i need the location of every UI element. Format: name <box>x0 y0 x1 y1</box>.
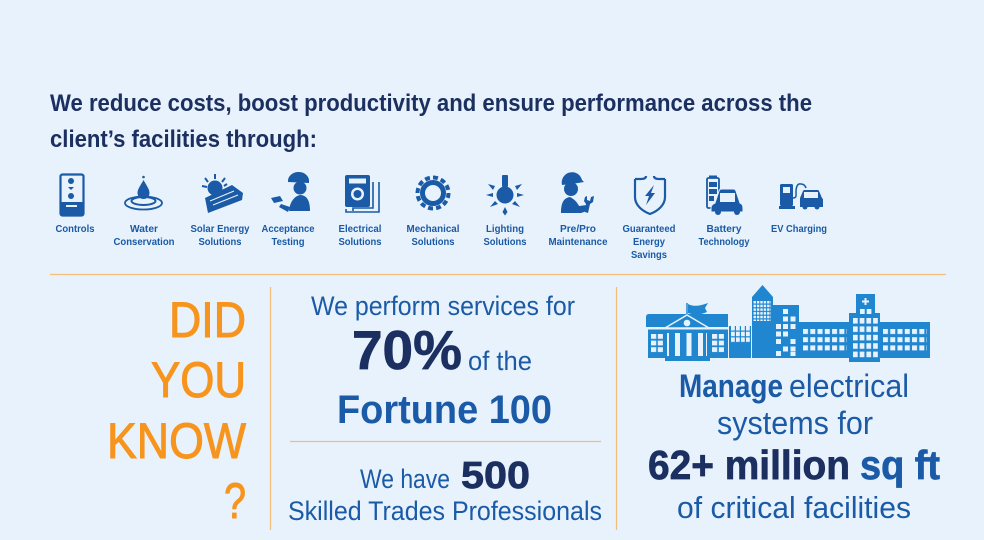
did you know: YOU <box>151 352 246 408</box>
stat: manage electrical systems: systems for <box>717 405 873 441</box>
icon: acceptance testing <box>271 172 310 212</box>
icon: battery and car <box>707 176 743 215</box>
stat: 500 skilled trades professionals: Skilled Trades Professionals <box>288 496 602 526</box>
did you know: ? <box>224 473 246 529</box>
label: solar energy solutions <box>190 223 250 248</box>
divider lines <box>50 274 946 530</box>
label: controls: Controls <box>56 223 95 235</box>
label: acceptance testing <box>262 223 315 248</box>
label: guaranteed energy savings <box>622 223 676 261</box>
label: water conservation: Conservation <box>114 236 174 248</box>
label: battery technology: Technology <box>698 236 750 248</box>
label: solar energy solutions: Solutions <box>198 236 242 248</box>
stat: 70% of the fortune 100 <box>311 291 575 432</box>
icon: pre/pro maintenance <box>561 172 594 213</box>
heading: client’s facilities through: <box>50 126 317 153</box>
label: electrical solutions: Solutions <box>338 236 382 248</box>
label: battery technology: Battery <box>706 223 742 235</box>
label: lighting solutions <box>484 223 527 248</box>
label: guaranteed energy savings: Savings <box>631 249 667 261</box>
label: pre/pro maintenance: Maintenance <box>548 236 608 248</box>
stat: manage electrical systems: 62+ million <box>648 442 850 488</box>
label: electrical solutions <box>338 223 382 248</box>
icon: shield <box>635 176 665 214</box>
did you know: KNOW <box>107 413 247 469</box>
tower <box>752 285 773 358</box>
stat: 500 skilled trades professionals: 500 <box>461 455 530 497</box>
icon: solar energy <box>202 174 243 213</box>
label: battery technology <box>698 223 750 248</box>
label: acceptance testing: Acceptance <box>262 223 315 235</box>
icon: gear <box>418 178 448 208</box>
label: guaranteed energy savings: Guaranteed <box>622 223 676 235</box>
label: water conservation: Water <box>130 223 158 235</box>
label: lighting solutions: Solutions <box>484 236 527 248</box>
hospital <box>849 294 880 362</box>
icon: controls <box>60 174 84 216</box>
label: ev charging: EV Charging <box>771 223 827 235</box>
stat: manage electrical systems: sq ft <box>860 442 940 488</box>
right block <box>880 322 930 358</box>
heading: We reduce costs, boost productivity and ensure performance across the <box>50 90 812 117</box>
stat: manage electrical systems <box>648 368 940 525</box>
label: pre/pro maintenance: Pre/Pro <box>560 223 596 235</box>
icon: ev charging <box>779 184 823 210</box>
label: pre/pro maintenance <box>548 223 608 248</box>
icon: light bulb <box>486 175 524 216</box>
mid block <box>799 322 849 358</box>
label: mechanical solutions: Mechanical <box>406 223 460 235</box>
label: solar energy solutions: Solar Energy <box>190 223 250 235</box>
label: acceptance testing: Testing <box>272 236 304 248</box>
stat: 500 skilled trades professionals: We have <box>360 464 450 494</box>
label: water conservation <box>114 223 174 248</box>
stepped block <box>773 305 799 358</box>
icon: electrical multimeter <box>345 175 379 212</box>
wing with windows <box>729 326 751 358</box>
stat: 70% of the fortune 100: Fortune 100 <box>337 388 552 432</box>
label: guaranteed energy savings: Energy <box>633 236 665 248</box>
stat: manage electrical systems: of critical facilities <box>677 490 911 525</box>
label: mechanical solutions <box>406 223 460 248</box>
illustration: campus buildings <box>646 285 930 362</box>
icon: water conservation <box>125 176 162 210</box>
stat: 70% of the fortune 100: We perform services for <box>311 291 575 321</box>
label: lighting solutions: Lighting <box>486 223 524 235</box>
government hall <box>646 303 728 361</box>
label: mechanical solutions: Solutions <box>412 236 455 248</box>
stat: manage electrical systems: Manage <box>679 368 783 404</box>
stat: 500 skilled trades professionals <box>288 455 602 526</box>
heading <box>50 90 812 153</box>
did you know <box>107 292 247 529</box>
stat: 70% of the fortune 100: 70% <box>352 319 462 381</box>
icon row <box>56 172 827 261</box>
stat: 70% of the fortune 100: of the <box>468 346 532 376</box>
label: electrical solutions: Electrical <box>338 223 382 235</box>
did you know: DID <box>169 292 246 348</box>
stat: manage electrical systems: electrical <box>789 368 909 404</box>
